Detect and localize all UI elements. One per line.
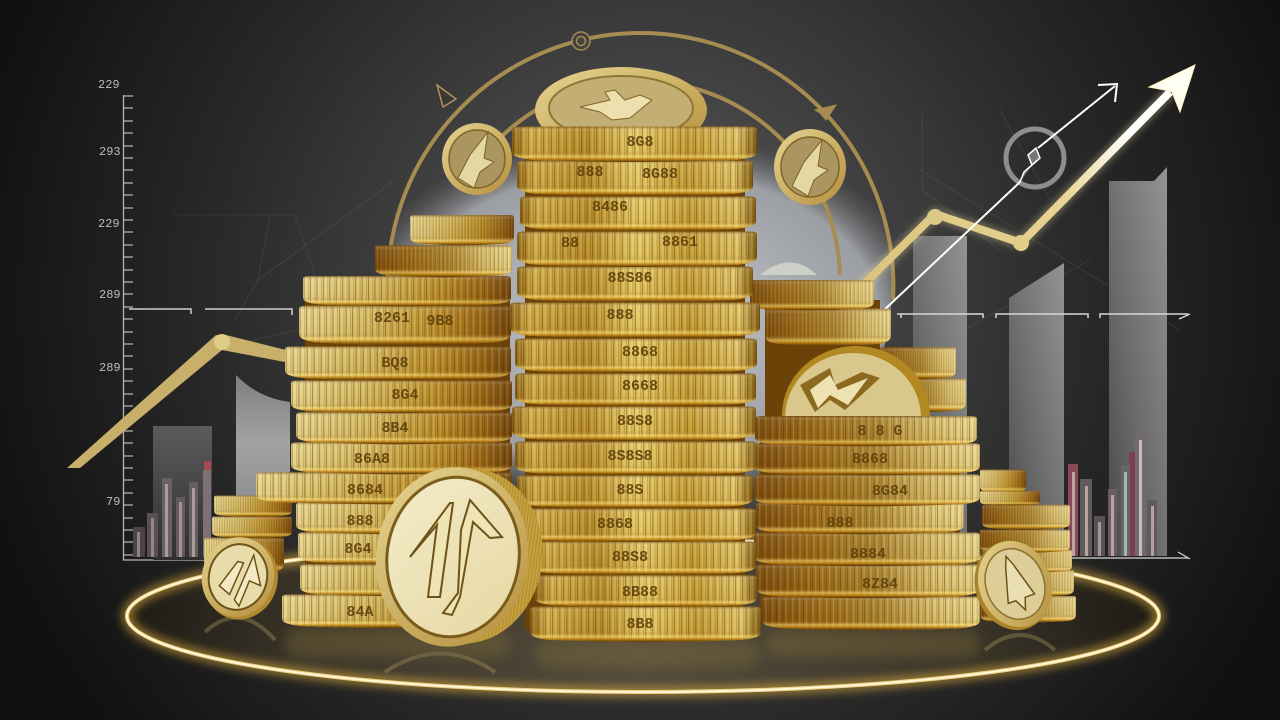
right background bars [913, 167, 1167, 560]
coin engravings: 8Z84 [862, 576, 898, 593]
coin engravings: 888 [576, 164, 604, 181]
top flat coin [535, 67, 707, 153]
coin engravings: 8G8 [626, 134, 654, 151]
coin engravings: 8G4 [344, 541, 372, 558]
coin engravings: 86A8 [354, 451, 390, 468]
far right small stack [980, 470, 1076, 622]
left coin stack [256, 215, 514, 628]
small coin right [962, 530, 1065, 641]
axis labels: 229 [98, 217, 120, 231]
far left small stack [204, 496, 292, 573]
axis labels: 289 [99, 288, 121, 302]
left mini bar chart [133, 461, 211, 557]
right axis brackets [897, 314, 1190, 559]
coin engravings: 8G4 [391, 387, 419, 404]
gold arc with markers [388, 32, 893, 300]
axis labels: 229 [98, 78, 120, 92]
axis labels: 79 [106, 495, 120, 509]
coin engravings: 9B8 [426, 313, 454, 330]
center coin stack [510, 127, 761, 642]
axis labels: 289 [99, 361, 121, 375]
middle right half coin [782, 346, 930, 416]
large coin with up arrows [364, 456, 554, 659]
coin engravings: 84A [346, 604, 374, 621]
gold growth arrow [860, 65, 1195, 288]
coin engravings: 88S8 [617, 413, 653, 430]
icon: arc arrow marker [815, 105, 836, 120]
coin engravings: 888 [606, 307, 634, 324]
coin engravings [826, 423, 908, 593]
coin engravings: 8S8S8 [607, 448, 653, 465]
axis labels: 293 [99, 145, 121, 159]
coin engravings: 8684 [347, 482, 383, 499]
coin engravings: 88 [561, 235, 579, 252]
coin engravings: BQ8 [381, 355, 409, 372]
coin engravings: 8668 [622, 378, 658, 395]
top right coin [774, 129, 846, 205]
coin engravings: 888 [346, 513, 374, 530]
coin engravings: 888 [826, 515, 854, 532]
left gold trend line [67, 334, 290, 468]
coin engravings: 88S8 [612, 549, 648, 566]
left background bars [153, 375, 290, 560]
floor with glowing ring [127, 540, 1159, 692]
coin engravings [561, 134, 698, 633]
icon: arc triangle [437, 85, 456, 107]
white thin arrow with ring [882, 84, 1117, 312]
coin engravings: 8868 [597, 516, 633, 533]
coin reflections on floor [205, 618, 1055, 672]
axis labels [98, 78, 121, 509]
coin engravings: 8261 [374, 310, 410, 327]
coin engravings: 8B4 [381, 420, 409, 437]
coin engravings: 8861 [662, 234, 698, 251]
coin engravings: 8B88 [622, 584, 658, 601]
coin engravings: 8B8 [626, 616, 654, 633]
small coin left [193, 529, 286, 627]
right coin stack [750, 262, 980, 630]
right mini bar chart [1068, 434, 1157, 556]
coin engravings: 8 8 G [857, 423, 903, 440]
coin engravings: 8486 [592, 199, 628, 216]
coin engravings: 88S [616, 482, 644, 499]
coin engravings: 8G84 [872, 483, 908, 500]
coin engravings: 8868 [852, 451, 888, 468]
coin engravings [344, 310, 454, 621]
left chart axis [98, 78, 205, 560]
network lines [174, 110, 1180, 350]
top left coin [442, 123, 512, 195]
icon: arc medallion [572, 32, 590, 50]
left bracket lines [129, 309, 292, 315]
coin engravings: 8884 [850, 546, 886, 563]
coin engravings: 8G88 [642, 166, 678, 183]
light halo behind coins [390, 153, 892, 488]
coin engravings: 88S86 [607, 270, 653, 287]
coin engravings: 8868 [622, 344, 658, 361]
